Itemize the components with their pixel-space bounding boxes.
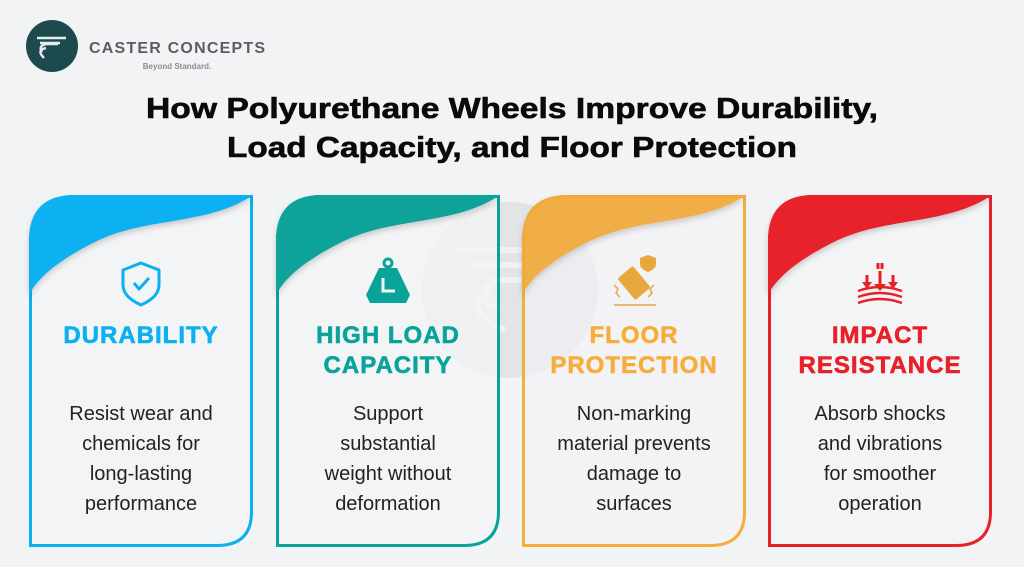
logo: Beyond Standard.	[143, 62, 211, 71]
icon: weight	[366, 259, 410, 303]
panel: floor protection	[522, 195, 746, 546]
heading: RESISTANCE	[799, 352, 961, 379]
text: chemicals for	[82, 433, 200, 455]
text: weight without	[324, 463, 452, 485]
text: Absorb shocks	[814, 403, 946, 425]
heading	[550, 322, 718, 379]
panel: impact resistance	[768, 195, 992, 546]
heading: FLOOR	[590, 322, 678, 349]
text: operation	[838, 493, 922, 515]
logo: CASTER CONCEPTS	[89, 40, 265, 57]
title: Load Capacity, and Floor Protection	[227, 132, 797, 164]
heading: IMPACT	[832, 322, 928, 349]
text: Resist wear and	[69, 403, 213, 425]
text: deformation	[335, 493, 441, 515]
panel: load capacity	[276, 195, 500, 546]
logo	[26, 20, 265, 72]
text: long-lasting	[90, 463, 192, 485]
text: material prevents	[557, 433, 711, 455]
text: performance	[85, 493, 197, 515]
text: Support	[353, 403, 423, 425]
text: Non-marking	[577, 403, 691, 425]
title	[146, 93, 878, 164]
icon: impact	[858, 263, 902, 303]
heading: PROTECTION	[550, 352, 718, 379]
title: How Polyurethane Wheels Improve Durability,	[146, 93, 878, 125]
heading: DURABILITY	[63, 322, 219, 349]
text: damage to	[587, 463, 681, 485]
heading	[316, 322, 460, 379]
text: for smoother	[824, 463, 936, 485]
text: surfaces	[596, 493, 672, 515]
icon: floor	[614, 255, 656, 305]
text: substantial	[340, 433, 436, 455]
icon: shield	[123, 263, 159, 305]
heading: CAPACITY	[324, 352, 452, 379]
text	[69, 403, 213, 515]
panel: durability	[29, 195, 253, 546]
heading	[799, 322, 961, 379]
text: and vibrations	[818, 433, 942, 455]
heading: HIGH LOAD	[316, 322, 460, 349]
text	[324, 403, 452, 515]
text	[557, 403, 711, 515]
watermark	[422, 202, 598, 378]
text	[814, 403, 946, 515]
